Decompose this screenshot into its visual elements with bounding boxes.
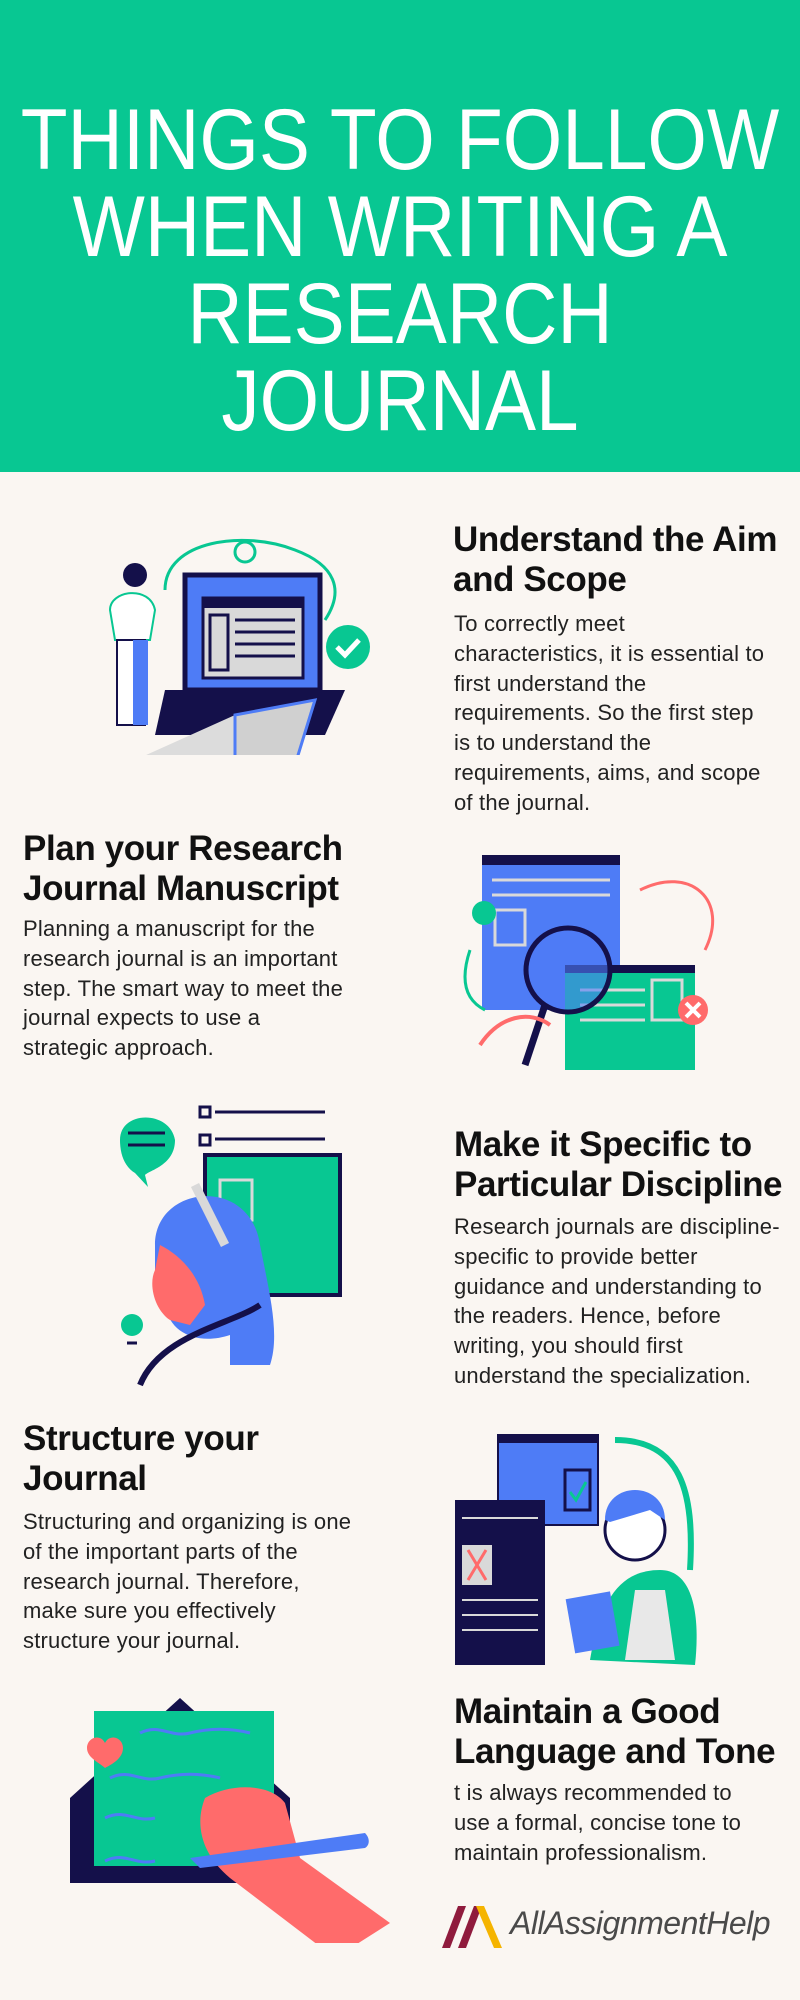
text: specific discipline: guidance and understanding to xyxy=(454,1274,762,1299)
text: specific discipline: the readers. Hence, before xyxy=(454,1303,721,1328)
text: plan manuscript: journal expects to use a xyxy=(23,1005,260,1030)
text: structure journal: make sure you effectively xyxy=(23,1598,276,1623)
text: understand aim: of the journal. xyxy=(454,790,590,815)
illustration: woman with documents xyxy=(455,1434,697,1665)
heading: language and tone: Maintain a Good xyxy=(454,1692,720,1731)
illustration: laptop and person xyxy=(109,538,370,755)
illustration: woman with thoughts xyxy=(120,1106,342,1386)
text: plan manuscript: research journal is an important xyxy=(23,946,338,971)
heading: plan manuscript: Journal Manuscript xyxy=(23,869,339,908)
heading: specific discipline: Make it Specific to xyxy=(454,1125,752,1164)
text: structure journal xyxy=(23,1509,351,1653)
heading: understand aim: and Scope xyxy=(453,560,626,599)
text: specific discipline: writing, you should first xyxy=(454,1333,683,1358)
text: structure journal: structure your journal. xyxy=(23,1628,240,1653)
text: language and tone: t is always recommended to xyxy=(454,1780,732,1805)
text: language and tone: use a formal, concise tone to xyxy=(454,1810,741,1835)
text: plan manuscript: strategic approach. xyxy=(23,1035,214,1060)
text: plan manuscript: Planning a manuscript for the xyxy=(23,916,315,941)
text: understand aim: requirements. So the first step xyxy=(454,700,754,725)
text: plan manuscript: step. The smart way to meet the xyxy=(23,976,343,1001)
illustration: envelope letter with pen xyxy=(70,1698,390,1943)
heading: structure journal: Structure your xyxy=(23,1419,259,1458)
header banner xyxy=(0,0,800,472)
heading: language and tone xyxy=(454,1692,775,1771)
heading: specific discipline xyxy=(454,1125,782,1204)
text: language and tone xyxy=(454,1780,741,1865)
heading: structure journal xyxy=(23,1419,259,1498)
heading: understand aim xyxy=(453,520,777,599)
title: THINGS TO FOLLOW xyxy=(21,92,779,188)
heading: plan manuscript: Plan your Research xyxy=(23,829,343,868)
text: structure journal: research journal. Therefore, xyxy=(23,1569,300,1594)
heading: understand aim: Understand the Aim xyxy=(453,520,777,559)
heading: specific discipline: Particular Discipline xyxy=(454,1165,782,1204)
text: language and tone: maintain professionalism. xyxy=(454,1840,707,1865)
heading: structure journal: Journal xyxy=(23,1459,147,1498)
text: specific discipline: Research journals are discipline- xyxy=(454,1214,780,1239)
text: specific discipline xyxy=(454,1214,780,1388)
illustration: magnifier and pages xyxy=(463,855,714,1070)
logo text: AllAssignmentHelp xyxy=(510,1905,770,1941)
heading: language and tone: Language and Tone xyxy=(454,1732,775,1771)
text: structure journal: of the important parts of the xyxy=(23,1539,298,1564)
heading: plan manuscript xyxy=(23,829,343,908)
logo xyxy=(442,1905,770,1948)
text: plan manuscript xyxy=(22,916,343,1060)
text: understand aim: requirements, aims, and scope xyxy=(454,760,761,785)
text: understand aim: characteristics, it is essential to xyxy=(454,641,764,666)
text: structure journal: Structuring and organizing is one xyxy=(23,1509,351,1534)
text: specific discipline: specific to provide better xyxy=(454,1244,698,1269)
text: understand aim xyxy=(454,611,764,815)
text: understand aim: is to understand the xyxy=(454,730,651,755)
icon: logo mark xyxy=(442,1906,502,1948)
text: specific discipline: understand the specialization. xyxy=(454,1363,751,1388)
title: JOURNAL xyxy=(221,353,579,449)
text: understand aim: first understand the xyxy=(454,671,646,696)
title: WHEN WRITING A xyxy=(73,179,727,275)
title: RESEARCH xyxy=(187,266,613,362)
text: understand aim: To correctly meet xyxy=(454,611,625,636)
title xyxy=(21,92,779,449)
